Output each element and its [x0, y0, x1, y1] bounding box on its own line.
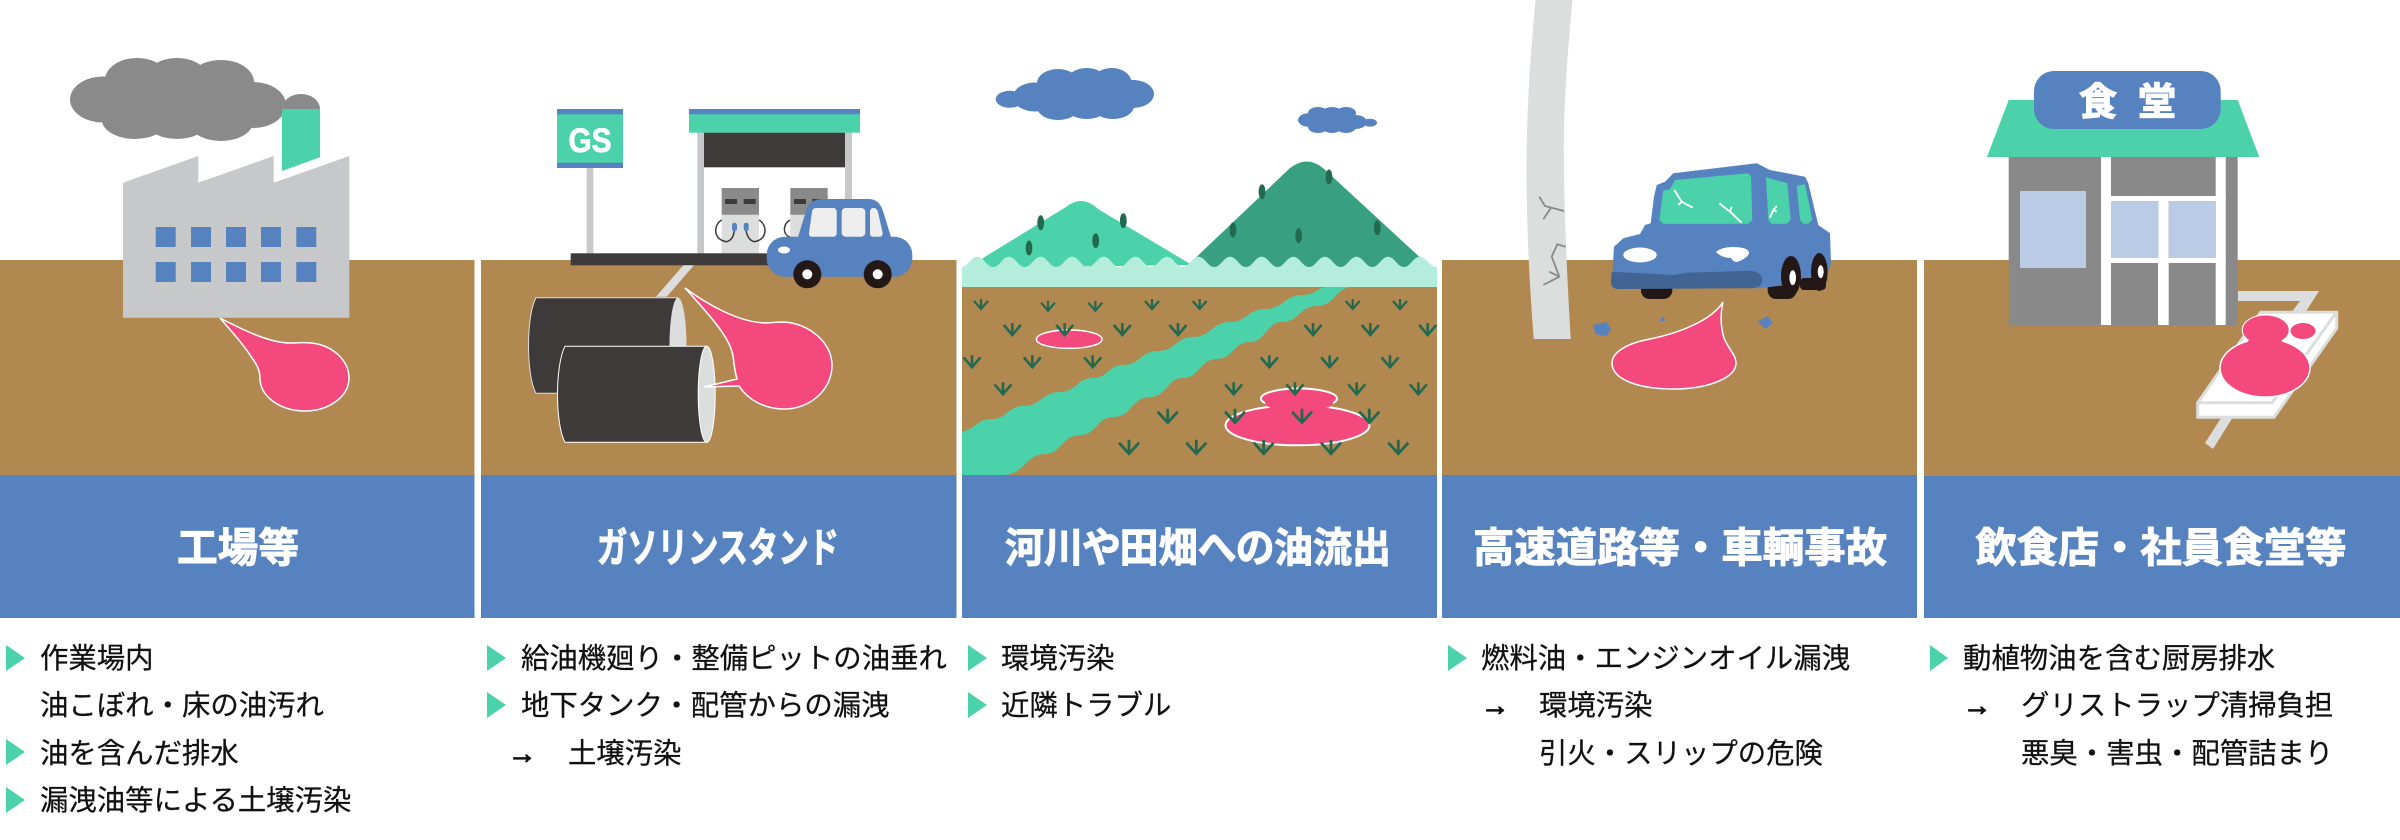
icon: rice sprouts — [964, 299, 1436, 454]
bullet list: restaurant — [1930, 643, 2333, 770]
icon: blue car — [767, 199, 912, 288]
icon: station base slab — [571, 253, 776, 265]
icon: canteen sign: 堂 — [2138, 82, 2176, 124]
section header: road accident: 高速道路等・車輌事故 — [1473, 525, 1887, 571]
icon: GS sign: GS — [568, 122, 612, 160]
icon: grease trap — [2198, 312, 2337, 417]
ground: river and fields — [962, 287, 1437, 476]
bullet list: restaurant: 悪臭・害虫・配管詰まり — [2021, 738, 2333, 770]
icon: paddy embankment — [962, 257, 1437, 287]
icon: car debris — [1593, 316, 1773, 336]
icon: station canopy and pumps — [689, 109, 860, 254]
bullet list: road accident: 環境汚染 — [1539, 690, 1653, 722]
icon: canteen sign: 食 — [2079, 82, 2117, 124]
bullet list: factory: 油こぼれ・床の油汚れ — [40, 690, 324, 722]
bullet list: restaurant: グリストラップ清掃負担 — [2021, 690, 2333, 722]
bullet list: road accident — [1448, 643, 1850, 770]
ground: road accident — [1442, 260, 1917, 476]
bullet list: river and fields: 環境汚染 — [1001, 643, 1115, 675]
icon: GS sign — [557, 109, 623, 254]
icon: large blue cloud — [996, 68, 1154, 120]
icon: crashed blue car — [1611, 163, 1831, 299]
icon: small blue cloud — [1298, 107, 1377, 133]
section header: river and fields: 河川や田畑への油流出 — [1005, 525, 1391, 571]
icon: large oil puddle — [1226, 388, 1370, 445]
bullet list: river and fields: 近隣トラブル — [1001, 690, 1171, 722]
ground: restaurant — [1924, 260, 2400, 476]
icon: underground tank front — [558, 346, 715, 442]
panel: river and fields — [962, 68, 1437, 722]
bullet list: factory: 油を含んだ排水 — [40, 738, 239, 770]
section header: gas station: ガソリンスタンド — [597, 525, 839, 571]
bullet list: road accident: 引火・スリップの危険 — [1539, 738, 1823, 770]
section header: restaurant: 飲食店・社員食堂等 — [1976, 525, 2346, 571]
bullet list: gas station — [487, 643, 947, 770]
bullet list: road accident: 燃料油・エンジンオイル漏洩 — [1481, 643, 1850, 675]
panel: gas station — [481, 109, 956, 770]
section header: factory: 工場等 — [177, 525, 299, 571]
section header: gas station — [481, 475, 956, 618]
section header: river and fields — [962, 475, 1437, 618]
icon: grease spill — [2220, 315, 2316, 397]
icon: river — [962, 287, 1353, 475]
icon: underground tank rear — [528, 298, 686, 393]
icon: factory building — [123, 109, 349, 318]
bullet list: gas station: → — [508, 738, 536, 770]
bullet list: gas station: 給油機廻り・整備ピットの油垂れ — [521, 643, 947, 675]
icon: canteen building — [1987, 100, 2259, 325]
icon: smoke cloud — [70, 58, 320, 141]
icon: oil drop — [220, 318, 349, 411]
bullet list: factory — [6, 643, 351, 817]
panel: factory — [0, 58, 474, 817]
icon: drain pipes — [2205, 291, 2319, 449]
section header: restaurant — [1924, 476, 2400, 618]
section header: factory — [0, 475, 474, 618]
icon: oil drop from car — [1612, 302, 1736, 389]
bullet list: road accident: → — [1481, 690, 1509, 722]
bullet list: restaurant: 動植物油を含む厨房排水 — [1963, 643, 2275, 675]
panel: road accident — [1442, 0, 1917, 770]
section header: road accident — [1442, 475, 1917, 618]
icon: utility pole with cracks — [1526, 0, 1572, 339]
bullet list: restaurant: → — [1963, 690, 1991, 722]
ground: factory — [0, 260, 474, 476]
icon: dark green mountain — [1188, 162, 1425, 268]
bullet list: gas station: 地下タンク・配管からの漏洩 — [521, 690, 890, 722]
bullet list: river and fields — [968, 643, 1171, 722]
bullet list: gas station: 土壌汚染 — [568, 738, 682, 770]
icon: trees on mountains — [1026, 170, 1381, 256]
icon: green mountain — [975, 201, 1192, 268]
bullet list: factory: 作業場内 — [40, 643, 154, 675]
ground: gas station — [481, 260, 956, 476]
icon: canteen sign — [2034, 71, 2221, 129]
bullet list: factory: 漏洩油等による土壌汚染 — [40, 785, 351, 817]
panel: restaurant — [1924, 71, 2400, 770]
icon: small oil puddle — [1036, 330, 1102, 348]
icon: underground pipe — [656, 265, 694, 297]
icon: oil leak from tank — [685, 288, 832, 409]
